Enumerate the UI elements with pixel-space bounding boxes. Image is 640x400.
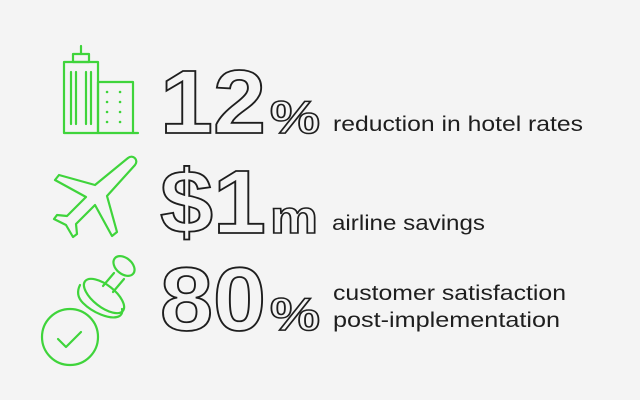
stat 3: 80%: % (270, 288, 320, 340)
label: customer satisfaction (333, 282, 566, 332)
stat 3: 80%: 80 (160, 250, 266, 350)
label: hotel rates: reduction in hotel rates (333, 113, 583, 136)
stat 1: 12%: 12 (160, 53, 266, 153)
stat 3: 80% (160, 250, 320, 350)
stat 1: 12%: % (270, 91, 320, 143)
stat 2: $1m: $1 (160, 153, 266, 253)
icon: airplane (54, 157, 136, 237)
stat 1: 12% (160, 53, 320, 153)
icon: stamp with check (42, 252, 138, 365)
icon: buildings (64, 46, 138, 133)
label: airline savings: airline savings (332, 212, 485, 235)
label: customer satisfaction: post-implementation (333, 309, 560, 332)
label: customer satisfaction: customer satisfaction (333, 282, 566, 305)
stat 2: $1m (160, 153, 318, 253)
stat 2: $1m: m (270, 191, 318, 243)
